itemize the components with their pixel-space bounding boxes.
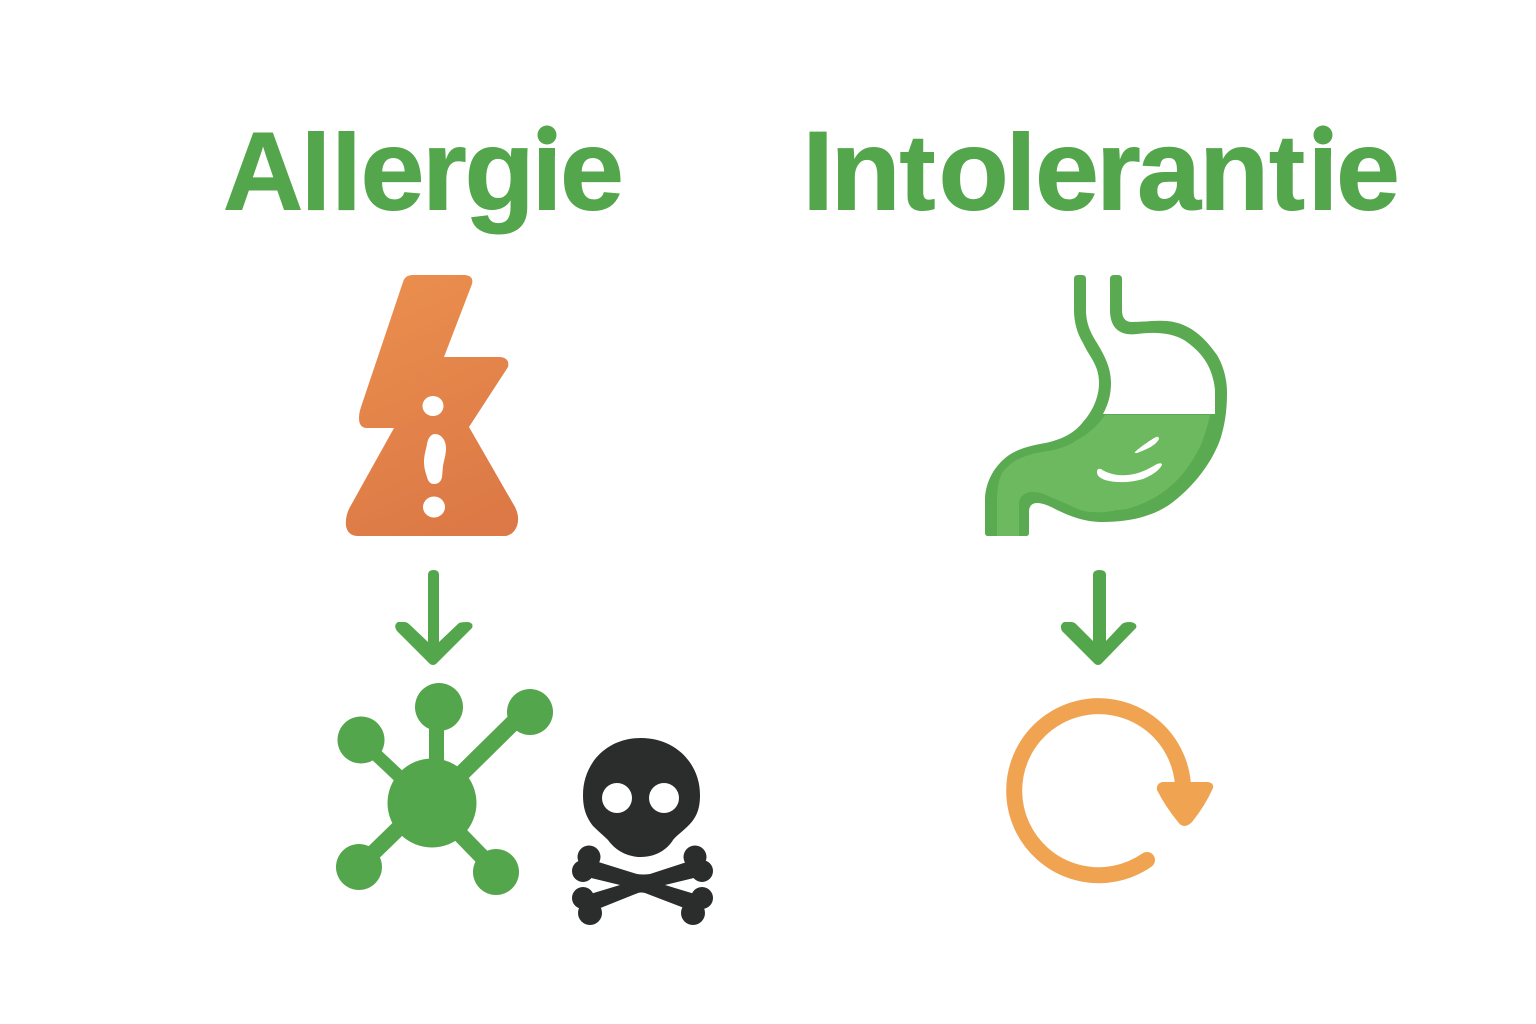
icon: skull and crossbones xyxy=(572,738,713,925)
heading: Intolerantie: t xyxy=(900,112,935,232)
heading: Allergie: erg xyxy=(360,106,535,234)
heading: Allergie xyxy=(223,106,624,234)
heading: Intolerantie: o xyxy=(938,106,1009,234)
heading: Intolerantie: e xyxy=(1336,106,1400,234)
icon: stomach xyxy=(985,275,1227,536)
icon: orange circular arrow xyxy=(1014,706,1213,875)
heading: Intolerantie xyxy=(802,106,1400,234)
heading: Allergie: i xyxy=(532,112,562,232)
heading: Intolerantie: n xyxy=(830,106,901,234)
heading: Intolerantie: eran xyxy=(1035,106,1269,234)
arrow: allergy down arrow xyxy=(395,570,472,665)
arrow: intolerance down arrow xyxy=(1061,570,1136,665)
heading: Allergie: A xyxy=(223,110,303,234)
heading: Allergie: ll xyxy=(301,112,362,232)
heading: Allergie: e xyxy=(560,106,624,234)
icon: green molecule / virus xyxy=(336,683,553,895)
heading: Intolerantie: I xyxy=(802,108,834,234)
heading: Intolerantie: ti xyxy=(1269,112,1338,232)
icon: orange lightning bolt with exclamation mark xyxy=(346,275,518,536)
heading: Intolerantie: l xyxy=(1006,112,1036,232)
